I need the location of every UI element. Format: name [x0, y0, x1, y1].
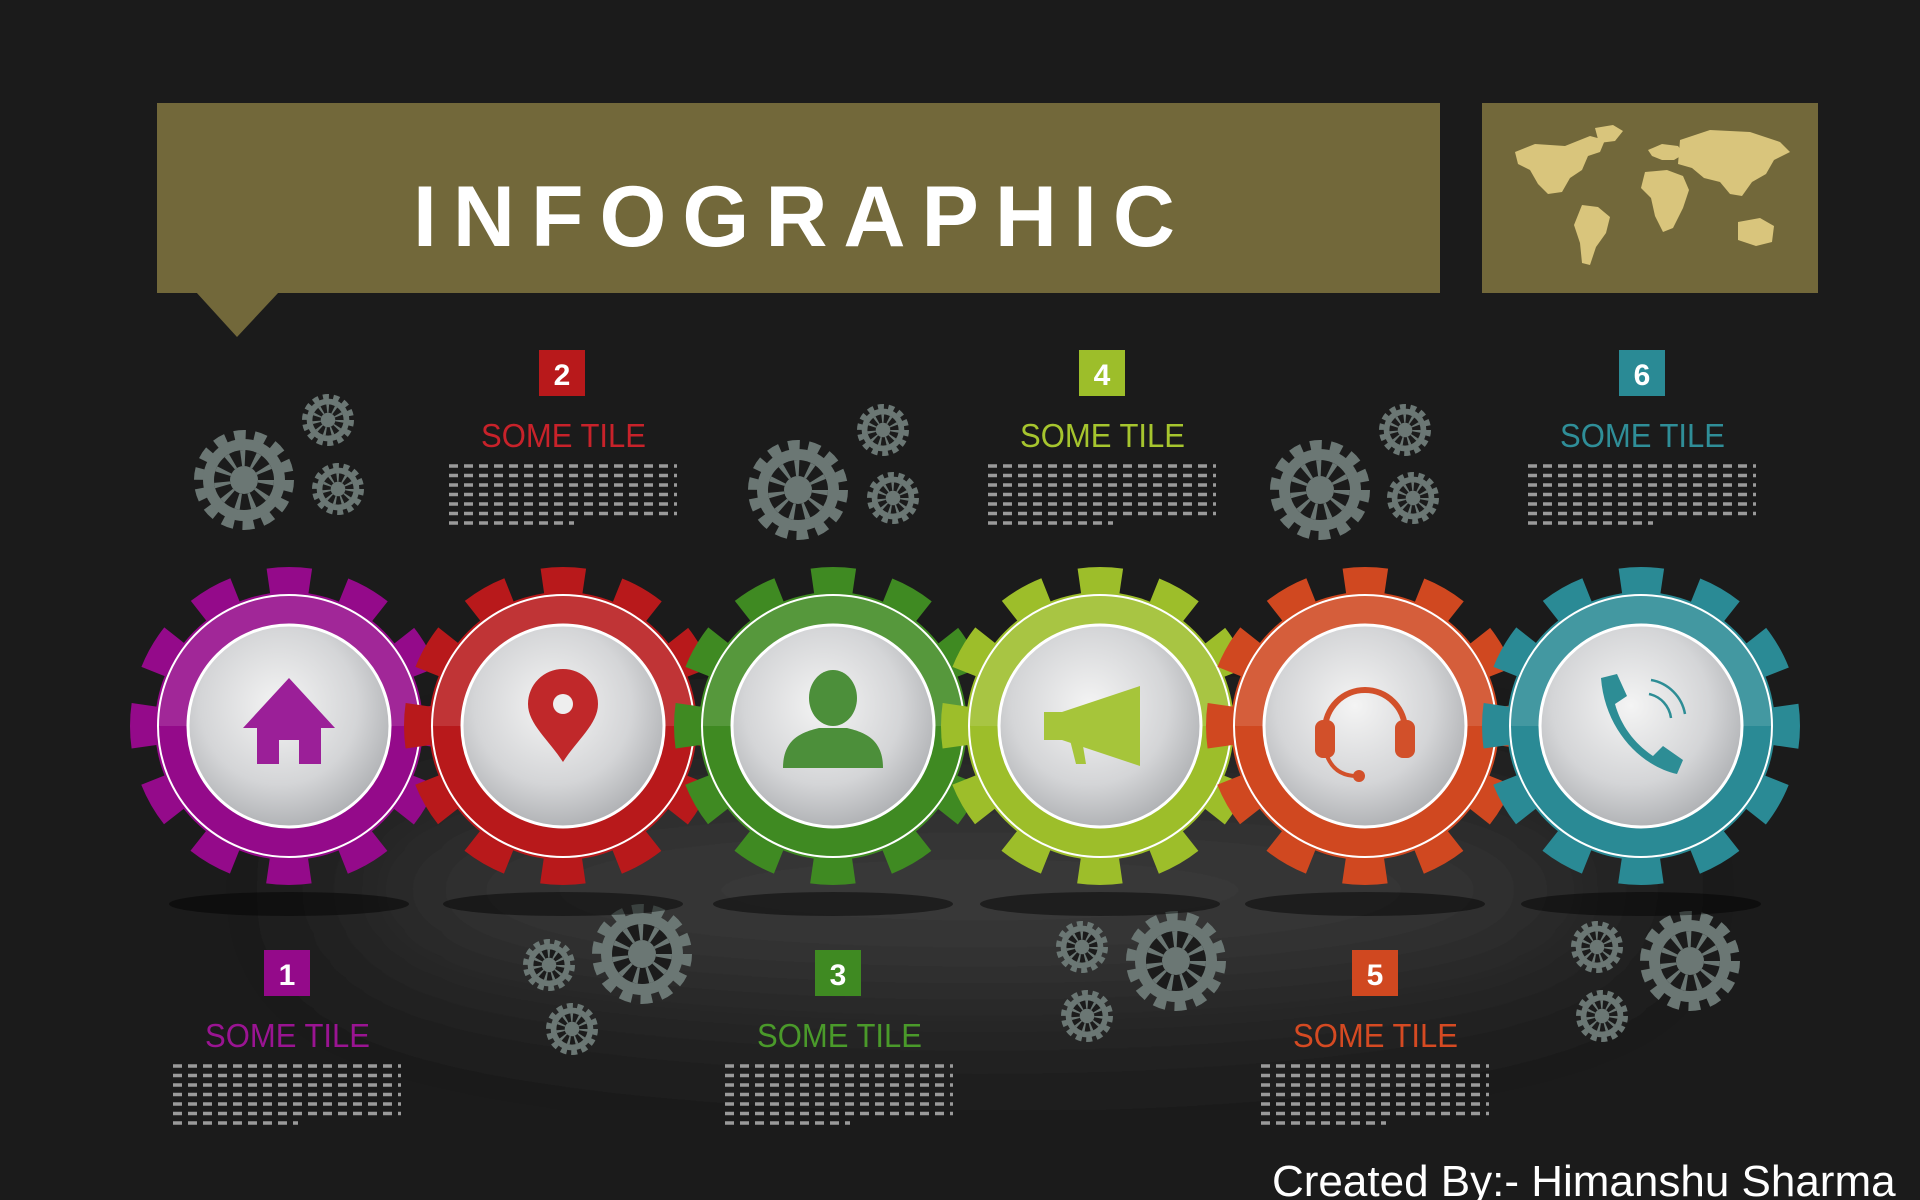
gear 6: teal phone — [1495, 580, 1787, 916]
step 2 label — [449, 350, 677, 523]
step 5 label — [1261, 950, 1489, 1123]
step 1 label: SOME TILE — [205, 1017, 370, 1054]
step 6 label: SOME TILE — [1560, 417, 1725, 454]
icon: megaphone — [1044, 686, 1140, 766]
icon: headset — [1315, 690, 1415, 782]
step 4 label — [988, 350, 1216, 523]
step 2 label: SOME TILE — [481, 417, 646, 454]
step 5 label: SOME TILE — [1293, 1017, 1458, 1054]
small gears cluster bottom 4 — [1061, 920, 1217, 1037]
icon: world map — [1515, 125, 1790, 265]
gear 4: lime megaphone — [954, 580, 1246, 916]
icon: house — [243, 678, 335, 764]
step 6 label — [1528, 350, 1756, 523]
step 2 label: 2 — [554, 359, 570, 392]
small gears cluster top 1 — [203, 399, 359, 521]
gear 3: green person — [687, 580, 979, 916]
title: INFOGRAPHIC — [413, 169, 1191, 265]
icon: person — [783, 670, 883, 768]
gear 1: purple home — [143, 580, 435, 916]
step 4 label: SOME TILE — [1020, 417, 1185, 454]
step 1 label — [173, 950, 401, 1123]
gear 2: red pin — [417, 580, 709, 916]
small gears cluster top 3 — [757, 409, 914, 531]
small gears cluster bottom 6 — [1576, 920, 1731, 1037]
step 6 label: 6 — [1634, 359, 1650, 392]
title banner — [157, 103, 1440, 337]
small gears cluster bottom 2 — [528, 913, 683, 1050]
step 3 label: SOME TILE — [757, 1017, 922, 1054]
gear 5: orange headset — [1219, 580, 1511, 916]
map box — [1482, 103, 1818, 293]
step 3 label — [725, 950, 953, 1123]
small gears cluster top 5 — [1279, 409, 1434, 531]
step 3 label: 3 — [830, 959, 846, 992]
step 1 label: 1 — [279, 959, 295, 992]
step 5 label: 5 — [1367, 959, 1383, 992]
icon: phone — [1601, 674, 1685, 774]
step 4 label: 4 — [1094, 359, 1111, 392]
icon: location pin — [528, 669, 598, 762]
